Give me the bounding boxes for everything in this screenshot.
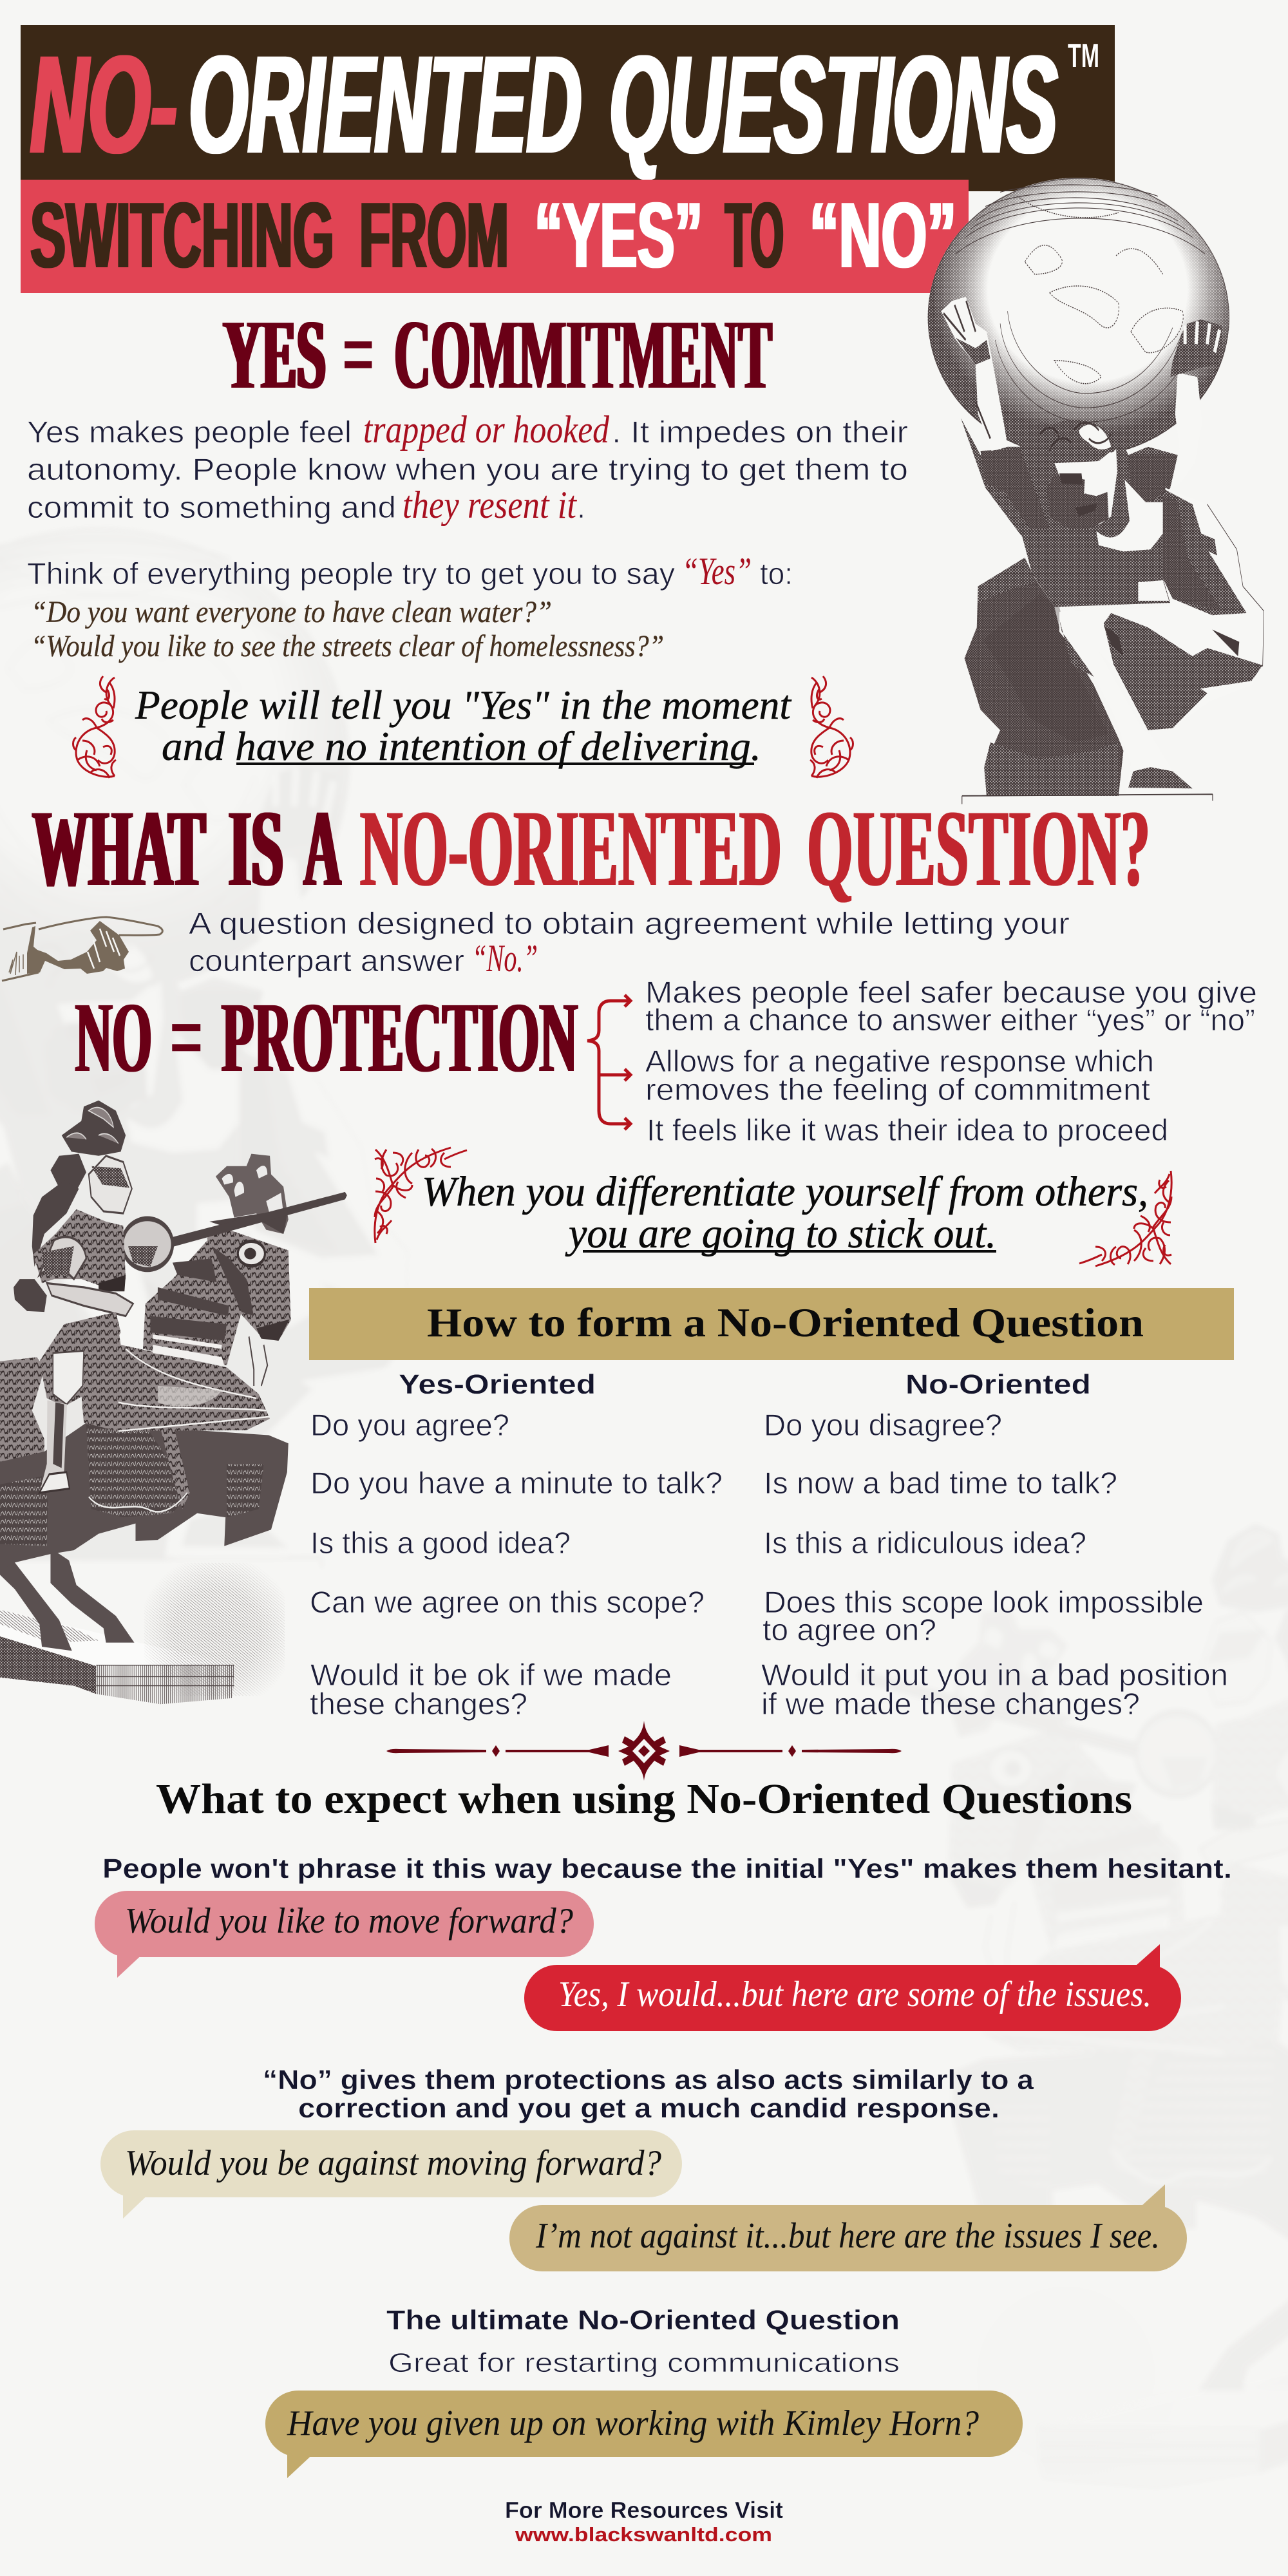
- icon: pointing hand: [2, 917, 162, 981]
- heading: what is a no-oriented question: NO-ORIENTED: [360, 788, 782, 909]
- heading: what to expect: What to expect when using No-Oriented Questions: [156, 1776, 1132, 1823]
- left mass of drapery: [965, 558, 1123, 796]
- text block: definition: “No.”: [472, 937, 538, 980]
- title banner: NO-: [30, 26, 177, 182]
- heading: yes = commitment: YES: [223, 300, 326, 410]
- icon: top left corner ornament: [375, 1148, 467, 1243]
- armored leg: [39, 1400, 70, 1493]
- text block: what people ask: [27, 550, 793, 663]
- speech bubble: kimley horn: Have you given up on working with Kimley Horn?: [287, 2403, 979, 2443]
- subtitle banner: “YES”: [535, 183, 703, 287]
- text: yes hesitation note: People won't phrase it this way because the initial "Yes" makes them hesitant.: [102, 1853, 1232, 1884]
- text: the ultimate question: [386, 2305, 900, 2378]
- table: no-oriented column: Is now a bad time to talk?: [764, 1466, 1117, 1500]
- table: yes-oriented column: Is this a good idea?: [310, 1526, 571, 1560]
- title banner: [21, 25, 1115, 191]
- quote: yes in the moment: People will tell you "Yes" in the moment: [135, 683, 792, 728]
- speech bubble: i'm not against: I’m not against it...but here are the issues I see.: [535, 2216, 1160, 2256]
- quote: yes in the moment: [135, 683, 792, 769]
- subtitle banner: SWITCHING: [30, 183, 334, 287]
- speech bubble: would you be against: [100, 2130, 682, 2219]
- heading: no = protection: =: [171, 981, 202, 1093]
- lance: [155, 1192, 347, 1251]
- footer: For More Resources Visit: [505, 2497, 783, 2523]
- illustration: Atlas holding the globe: [928, 178, 1264, 804]
- title banner: TM: [1068, 37, 1099, 75]
- panel: how to form banner: [309, 1288, 1234, 1360]
- legs: [50, 1548, 135, 1643]
- text block: what people ask: to:: [760, 556, 793, 591]
- table: no-oriented column: Would it put you in a bad position: [761, 1658, 1228, 1692]
- quote: stick out: [422, 1168, 1148, 1257]
- table: no-oriented column: [761, 1369, 1228, 1721]
- icon: bottom right corner ornament: [1079, 1171, 1171, 1266]
- head: [1054, 447, 1117, 525]
- text block: definition: [189, 906, 1070, 980]
- text block: protection list: Allows for a negative response which: [645, 1044, 1154, 1078]
- text: no gives protection note: [263, 2065, 1034, 2124]
- heading: yes = commitment: [223, 300, 772, 410]
- speech bubble: would you like: [95, 1891, 594, 1978]
- text block: protection list: [645, 975, 1257, 1147]
- right arm and hand: [1171, 373, 1202, 488]
- table: yes-oriented column: [310, 1369, 723, 1721]
- quote: stick out: When you differentiate yourself from others,: [422, 1168, 1148, 1215]
- heading: what is a no-oriented question: IS: [229, 788, 283, 909]
- armor torso: [33, 1209, 126, 1291]
- heading: no = protection: NO: [75, 981, 152, 1093]
- plumes: [62, 1101, 126, 1156]
- table: no-oriented column: to agree on?: [762, 1613, 936, 1647]
- watermark: enlarged atlas: [0, 528, 407, 1574]
- watermark: enlarged mirrored knight: [858, 1524, 1288, 2490]
- text block: what people ask: “Would you like to see the streets clear of homelessness?”: [31, 629, 664, 663]
- title banner: ORIENTED: [189, 26, 582, 182]
- speech bubble: yes i would: Yes, I would...but here are some of the issues.: [558, 1975, 1151, 2014]
- table: no-oriented column: Is this a ridiculous idea?: [764, 1526, 1086, 1560]
- quote: yes in the moment: and have no intention of delivering.: [162, 724, 761, 769]
- table: no-oriented column: No-Oriented: [905, 1369, 1091, 1400]
- text block: protection list: removes the feeling of commitment: [645, 1072, 1150, 1106]
- table: yes-oriented column: Can we agree on this scope?: [310, 1585, 705, 1619]
- table: yes-oriented column: Would it be ok if we made: [310, 1658, 672, 1692]
- text block: yes explanation: [27, 408, 908, 526]
- text: no gives protection note: “No” gives them protections as also acts similarly to a: [263, 2065, 1034, 2096]
- heading: no = protection: PROTECTION: [222, 981, 578, 1093]
- dark body and skirts: [0, 1423, 289, 1571]
- speech bubble: i'm not against: [509, 2184, 1187, 2271]
- text block: protection list: Makes people feel safer because you give: [645, 975, 1257, 1009]
- neck armor: [143, 1238, 242, 1365]
- horse plume: [216, 1154, 289, 1234]
- table: yes-oriented column: Do you have a minute to talk?: [310, 1466, 723, 1500]
- table: yes-oriented column: Do you agree?: [310, 1408, 509, 1442]
- footer: [505, 2497, 783, 2546]
- text block: yes explanation: Yes makes people feel: [27, 415, 352, 449]
- saddle and thigh: [39, 1312, 121, 1406]
- text: the ultimate question: The ultimate No-Oriented Question: [386, 2305, 900, 2336]
- caparison: [0, 1357, 44, 1462]
- left arm and hand: [941, 297, 1008, 451]
- bracket with arrows: [587, 995, 630, 1130]
- illustration: knight on horseback: [0, 1101, 347, 1704]
- panel: how to form banner: How to form a No-Oriented Question: [427, 1300, 1144, 1345]
- text block: yes explanation: . It impedes on their: [612, 415, 908, 449]
- table: no-oriented column: Does this scope look impossible: [764, 1585, 1204, 1619]
- subtitle banner: TO: [725, 183, 784, 287]
- text block: yes explanation: .: [577, 490, 585, 524]
- speech bubble: kimley horn: [265, 2391, 1023, 2478]
- text block: definition: counterpart answer: [189, 943, 464, 978]
- horse head: [207, 1226, 291, 1341]
- text block: what people ask: “Do you want everyone to have clean water?”: [31, 595, 552, 629]
- table: no-oriented column: Do you disagree?: [764, 1408, 1002, 1442]
- heading: yes = commitment: =: [343, 300, 374, 410]
- text block: yes explanation: autonomy. People know when you are trying to get them to: [27, 452, 908, 486]
- text: no gives protection note: correction and you get a much candid response.: [298, 2093, 999, 2124]
- heading: yes = commitment: COMMITMENT: [394, 300, 772, 410]
- subtitle banner: [21, 180, 969, 293]
- footer: www.blackswanltd.com: [515, 2523, 772, 2546]
- cloth: [1059, 488, 1264, 730]
- text block: yes explanation: trapped or hooked: [363, 408, 610, 451]
- table: no-oriented column: if we made these changes?: [761, 1687, 1140, 1721]
- subtitle banner: “NO”: [810, 183, 956, 287]
- table: yes-oriented column: these changes?: [310, 1687, 527, 1721]
- base top: [0, 1610, 234, 1666]
- icon: left side flourish: [73, 676, 116, 778]
- table: yes-oriented column: Yes-Oriented: [399, 1369, 596, 1400]
- helmet: [89, 1156, 132, 1213]
- text block: what people ask: Think of everything people try to get you to say: [27, 556, 676, 591]
- heading: what is a no-oriented question: A: [304, 788, 341, 909]
- icon: right side flourish: [810, 676, 853, 778]
- speech bubble: would you be against: Would you be against moving forward?: [125, 2143, 661, 2183]
- speech bubble: would you like: Would you like to move forward?: [125, 1901, 573, 1941]
- quote: stick out: you are going to stick out.: [565, 1210, 996, 1257]
- heading: what is a no-oriented question: WHAT: [33, 788, 205, 909]
- shield: [122, 1218, 173, 1269]
- subtitle banner: FROM: [359, 183, 509, 287]
- right leg: [1059, 609, 1193, 794]
- text block: what people ask: “Yes”: [682, 550, 752, 592]
- text block: yes explanation: commit to something and: [27, 490, 396, 524]
- divider ornament: [386, 1721, 902, 1781]
- speech bubble: yes i would: [524, 1944, 1181, 2031]
- text block: definition: A question designed to obtain agreement while letting your: [189, 906, 1070, 940]
- text block: protection list: them a chance to answer either “yes” or “no”: [645, 1003, 1255, 1037]
- text block: yes explanation: they resent it: [402, 484, 577, 526]
- heading: no = protection: [75, 981, 578, 1093]
- text block: protection list: It feels like it was their idea to proceed: [647, 1113, 1168, 1147]
- text: the ultimate question: Great for restarting communications: [388, 2347, 900, 2378]
